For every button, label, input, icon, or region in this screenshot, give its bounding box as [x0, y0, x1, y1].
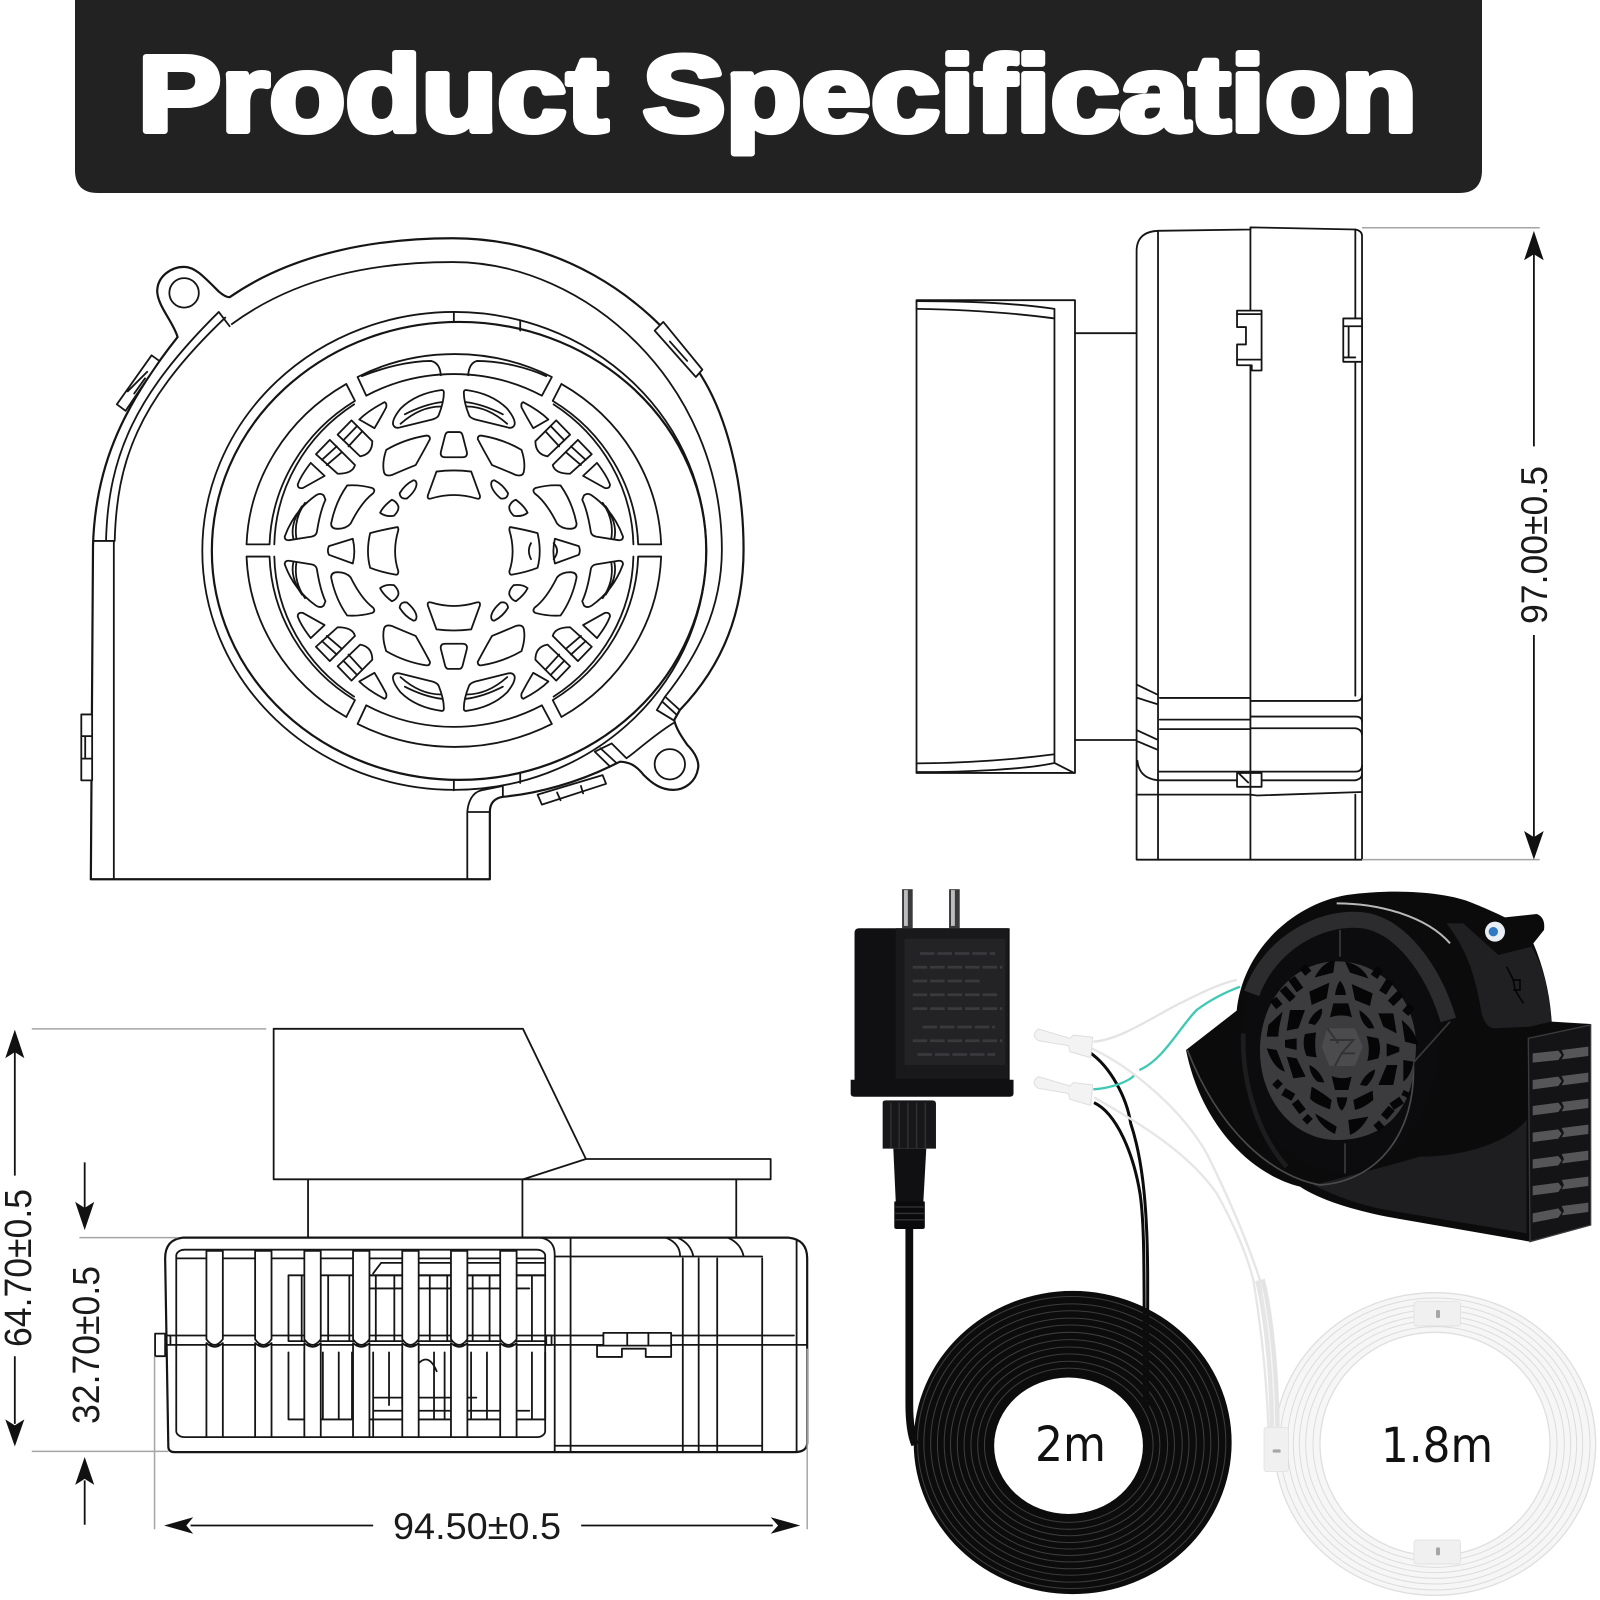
dimension 97.00 lines and arrows: [1362, 228, 1544, 860]
wires and connector pins: [1034, 980, 1272, 1427]
outlet duct: [274, 1029, 771, 1238]
inlet duct: [917, 300, 1137, 773]
grill side with fins: [155, 1250, 552, 1437]
fan silhouette: [1186, 892, 1591, 1242]
dimension text: 94.50±0.5: 94.50±0.5: [393, 1506, 561, 1547]
housing side panel: [1447, 923, 1551, 1028]
inlet rings: [202, 312, 706, 790]
bottom view line drawing: [5, 1029, 807, 1534]
housing shading: [1313, 1120, 1527, 1233]
fan housing outline: [81, 238, 744, 879]
title banner: [75, 0, 1482, 193]
fan mesh grill: [1260, 960, 1418, 1140]
rim highlight: [1337, 903, 1450, 943]
inlet ring: [1187, 915, 1450, 1185]
outlet with slats: [1528, 1025, 1591, 1242]
housing clip: [1507, 967, 1523, 1003]
white cable coil: [1260, 1280, 1596, 1595]
dimension lines and arrows: [5, 1029, 807, 1534]
label: 1.8m: 1.8m: [1381, 1418, 1493, 1474]
side view line drawing: [917, 227, 1544, 860]
screw: [1485, 922, 1505, 942]
blower fan photo: [1186, 892, 1591, 1242]
black cable coil: [914, 1291, 1232, 1594]
grill guard: [247, 354, 661, 747]
accessories photo area: [851, 889, 1232, 1594]
dimension text: 97.00±0.5: 97.00±0.5: [1514, 466, 1555, 624]
housing body: [156, 1238, 807, 1452]
main housing: [1137, 227, 1362, 860]
side clip: [597, 1333, 671, 1357]
dimension text: 32.70±0.5: 32.70±0.5: [66, 1266, 108, 1424]
label: 2m: 2m: [1035, 1417, 1106, 1473]
adapter cable: [909, 1229, 915, 1445]
front view line drawing of blower fan: [81, 238, 744, 879]
power adapter: [851, 889, 1014, 1229]
title banner: Product Specification: [138, 33, 1417, 154]
